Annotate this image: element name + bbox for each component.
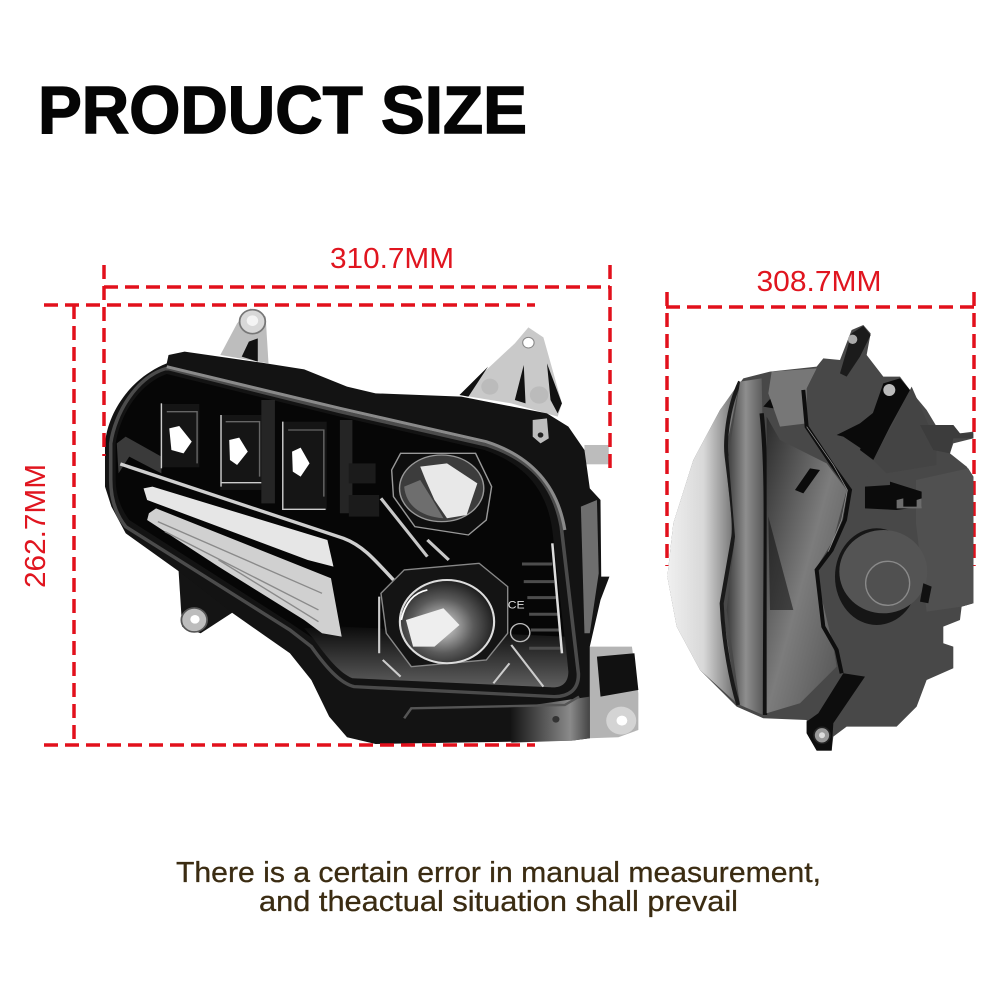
- DRL light strip lower: [147, 508, 342, 637]
- clear lens side: [667, 382, 740, 703]
- dimension: height of front view: [44, 305, 535, 745]
- lower right mounting bracket: [590, 647, 638, 738]
- rear arm bracket: [837, 378, 910, 460]
- right headlight side view: [667, 325, 973, 751]
- housing silhouette: [105, 352, 609, 744]
- dimension: width of side view: [666, 292, 974, 566]
- round dust cap: [835, 528, 932, 625]
- chrome DRL tube: [120, 464, 393, 580]
- lower body step: [404, 697, 579, 718]
- width label side: 308.7MM: [756, 266, 882, 298]
- connector clip: [865, 482, 922, 510]
- chrome floor lines: [379, 597, 543, 687]
- height label: 262.7MM: [20, 464, 52, 588]
- top clip: [763, 393, 788, 408]
- disclaimer note: There is a certain error in manual measurement,: [176, 857, 821, 889]
- upper lens glare: [117, 437, 161, 473]
- rear box lighter face: [916, 468, 973, 612]
- black housing seam: [803, 390, 850, 673]
- lens pillars: [261, 400, 352, 513]
- certification mark: CE: [508, 599, 525, 611]
- dark panel wedge: [768, 517, 793, 610]
- lower black bracket: [807, 673, 865, 751]
- top left mounting bracket: [220, 308, 268, 363]
- upper chrome band: [167, 367, 565, 530]
- black centre seam: [762, 413, 766, 715]
- connector block: [349, 463, 379, 517]
- disclaimer note: [176, 857, 821, 918]
- left headlight front view: [105, 308, 638, 744]
- silver panel rear: [767, 417, 847, 713]
- top arm bracket: [840, 326, 871, 377]
- projector module three: [282, 422, 327, 510]
- side body silhouette: [667, 325, 973, 751]
- DRL light strip upper: [144, 487, 333, 567]
- rear connector stub: [920, 425, 973, 453]
- lower left mounting tab: [179, 570, 236, 633]
- seam highlight: [807, 427, 847, 552]
- dark vent slit: [795, 468, 820, 493]
- disclaimer note: and theactual situation shall prevail: [259, 886, 738, 918]
- projector module one: [161, 403, 199, 468]
- screw: [552, 716, 559, 723]
- right side tab: [584, 445, 609, 464]
- lower body grey sheen: [511, 697, 590, 743]
- silver panel front: [727, 378, 765, 715]
- width label front: 310.7MM: [330, 243, 454, 275]
- lower projector lens: [381, 563, 508, 667]
- upper mounting screw: [533, 418, 549, 443]
- right rim highlight: [581, 500, 599, 633]
- title: PRODUCT SIZE: [38, 73, 527, 148]
- lens dark seam: [722, 382, 740, 705]
- cooling fins: [522, 543, 562, 653]
- DRL strip shading: [158, 522, 322, 622]
- chrome stalk: [381, 498, 449, 560]
- upper projector lens: [392, 453, 492, 535]
- rear arm shoulder: [873, 387, 937, 473]
- top right mounting bracket: [459, 327, 562, 417]
- projector module two: [220, 415, 261, 490]
- lens outer trim: [111, 368, 578, 697]
- rear box: [857, 465, 973, 612]
- certification circle: [511, 624, 530, 642]
- top shell: [768, 368, 817, 427]
- lens glass: [116, 374, 568, 687]
- lens floor reflection: [304, 627, 568, 687]
- dimension: width of front view: [104, 265, 610, 470]
